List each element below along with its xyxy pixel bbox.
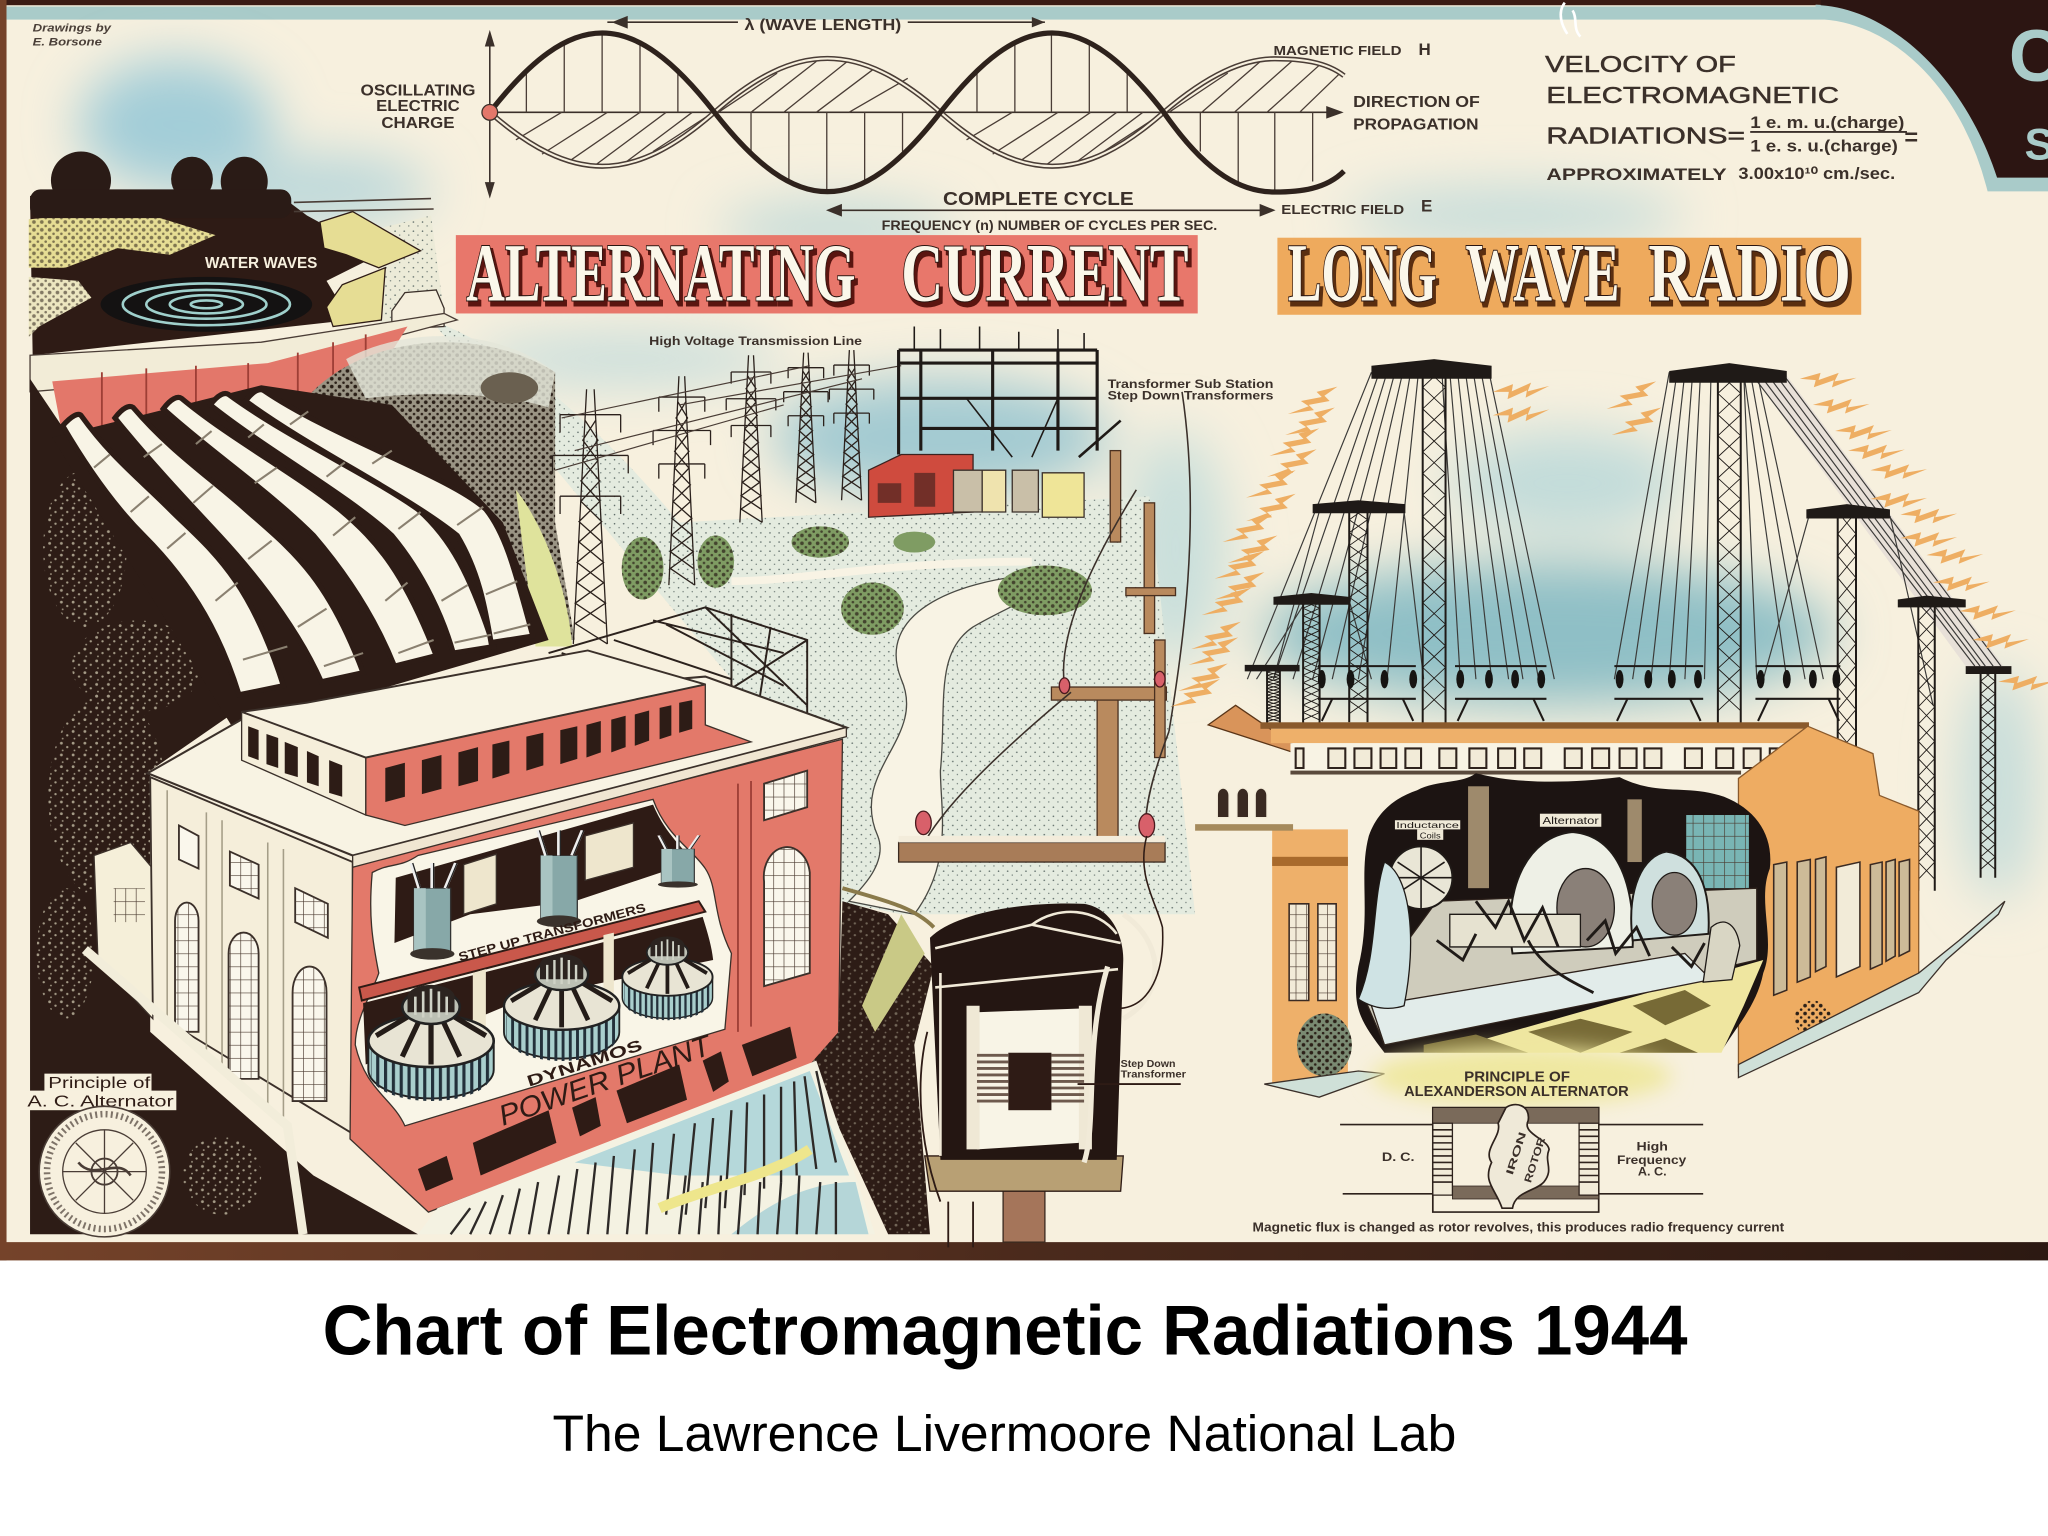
cutaway dark interior xyxy=(1356,773,1770,1053)
plant labels: STEP UP TRANSFORMERS xyxy=(457,901,647,964)
waterfall xyxy=(418,1027,875,1234)
schematic labels xyxy=(1382,1131,1686,1184)
wave labels: λ (WAVE LENGTH) xyxy=(744,17,901,34)
wave labels: DIRECTION OF xyxy=(1353,94,1480,111)
antenna wires xyxy=(1247,372,2001,705)
wave axes xyxy=(486,33,1341,196)
walkway xyxy=(1264,901,2005,1097)
floor slab xyxy=(359,901,705,1000)
cutaway interior xyxy=(355,799,731,1126)
banner: long wave radio: RADIO xyxy=(1651,231,1853,322)
oscillating charge dot xyxy=(482,104,498,120)
river xyxy=(849,575,1045,914)
velocity formula: 1 e. m. u.(charge) xyxy=(1750,114,1904,132)
banner: alternating current: CURRENT xyxy=(904,231,1191,322)
right wall windows xyxy=(1774,857,1910,995)
dark riverbank xyxy=(810,888,934,1234)
banner: long wave radio: WAVE xyxy=(1465,227,1620,318)
velocity formula: = xyxy=(1904,124,1918,150)
icon: alternator wheel xyxy=(39,1106,170,1237)
radio station building: Inductance xyxy=(1396,820,1459,830)
wave labels: CHARGE xyxy=(381,115,455,132)
velocity formula: ELECTROMAGNETIC xyxy=(1546,82,1839,108)
transmission labels xyxy=(649,335,1274,403)
red front wall xyxy=(350,739,842,1212)
alternator principle label xyxy=(25,1074,176,1110)
slide title: Chart of Electromagnetic Radiations 1944 xyxy=(323,1290,1688,1369)
velocity formula: VELOCITY OF xyxy=(1545,51,1736,77)
penstock pipes xyxy=(63,390,533,695)
bushes xyxy=(622,526,1092,635)
wave labels: OSCILLATING xyxy=(360,82,475,99)
utility poles xyxy=(899,392,1190,862)
schematic labels: D. C. xyxy=(1382,1150,1415,1164)
wave labels: H xyxy=(1418,40,1431,59)
roof and frieze xyxy=(1260,722,1809,729)
power plant: DYNAMOS xyxy=(525,1037,644,1090)
wave labels: FREQUENCY (n) NUMBER OF CYCLES PER SEC. xyxy=(882,218,1217,233)
water waves: WATER WAVES xyxy=(205,255,317,272)
waterfront hill with trees xyxy=(29,152,444,355)
lower room back wall xyxy=(363,917,713,1064)
velocity formula: RADIATIONS= xyxy=(1546,123,1745,149)
hillside right of pipes xyxy=(52,336,575,731)
magnetic flux caption: Magnetic flux is changed as rotor revolves, this produces radio frequency current xyxy=(1253,1220,1785,1235)
path along plant xyxy=(85,950,303,1234)
wave labels: PROPAGATION xyxy=(1353,116,1479,133)
left wall windows xyxy=(175,825,328,1101)
transformers tanks xyxy=(410,863,457,960)
right orange wall xyxy=(1738,726,1919,1071)
station transformers xyxy=(953,470,1084,517)
top right corner panel xyxy=(1561,0,2048,184)
alternator wheels xyxy=(1358,832,1740,1008)
banner: long wave radio xyxy=(1277,227,1861,322)
transmission towers xyxy=(552,350,901,644)
right wire band xyxy=(1750,372,2004,666)
machine labels xyxy=(1395,820,1460,829)
drawing credit: E. Borsone xyxy=(33,37,102,49)
switchyard frame xyxy=(549,607,807,731)
power plant xyxy=(94,650,846,1212)
slide subtitle: The Lawrence Livermoore National Lab xyxy=(552,1405,1456,1462)
machinery base xyxy=(1365,888,1757,1045)
alternator principle label: Principle of xyxy=(48,1075,151,1092)
alternator schematic xyxy=(1340,1105,1703,1212)
velocity formula xyxy=(1545,51,1918,184)
electromagnetic wave diagram xyxy=(482,33,1344,196)
wave labels: MAGNETIC FIELD xyxy=(1273,43,1401,58)
towers xyxy=(1423,366,1446,725)
fence lines xyxy=(294,199,434,212)
transformer core xyxy=(977,1008,1084,1149)
step down transformer label xyxy=(1121,1059,1186,1081)
wave labels: COMPLETE CYCLE xyxy=(943,188,1134,209)
arches under plant xyxy=(418,1027,797,1191)
banner: long wave radio: LONG xyxy=(1290,231,1439,322)
transmission labels: High Voltage Transmission Line xyxy=(649,335,863,348)
radio station building: Alternator xyxy=(1543,816,1600,827)
left wall xyxy=(150,777,353,1134)
transmission labels: Step Down Transformers xyxy=(1108,390,1274,403)
magnetic field curve xyxy=(490,58,1344,166)
dynamos xyxy=(622,937,713,1020)
banner: long wave radio: WAVE xyxy=(1468,231,1622,322)
roof monitor windows xyxy=(248,700,692,802)
left orange block xyxy=(1272,829,1348,1084)
roof monitor red face and shadow xyxy=(366,684,751,825)
interior pillars xyxy=(1468,786,1489,888)
schematic labels: A. C. xyxy=(1638,1165,1667,1179)
banner: long wave radio: RADIO xyxy=(1648,227,1851,318)
landscape: stippled valley xyxy=(431,320,1195,914)
electric field curve xyxy=(490,33,1344,192)
tile roof xyxy=(1208,705,1297,752)
frieze windows xyxy=(1296,748,1787,768)
principle of alexanderson alternator: PRINCIPLE OF xyxy=(1464,1069,1570,1085)
checker floor xyxy=(1384,960,1763,1053)
ground glow xyxy=(1371,1048,1672,1105)
transmission labels: Transformer Sub Station xyxy=(1108,378,1273,391)
drawing credit xyxy=(33,22,112,49)
house xyxy=(392,290,444,329)
radio wave bolts left xyxy=(1170,381,1661,707)
insulator rows xyxy=(1318,666,1840,721)
upper room back wall xyxy=(394,805,692,943)
cross arms xyxy=(1245,359,2011,674)
wave labels: ELECTRIC FIELD xyxy=(1281,202,1404,217)
banner: alternating current: CURRENT xyxy=(901,227,1189,318)
electric and magnetic arrows and hatching xyxy=(516,33,1339,192)
drawing credit: Drawings by xyxy=(33,22,112,34)
annex xyxy=(94,842,153,1019)
aqueduct wall xyxy=(30,313,457,451)
forested slope xyxy=(30,379,418,1234)
velocity formula: 3.00x10¹⁰ cm./sec. xyxy=(1738,165,1895,183)
velocity formula: 1 e. s. u.(charge) xyxy=(1750,138,1898,156)
banner: alternating current: ALTERNATING xyxy=(469,231,858,322)
sky clouds xyxy=(78,59,2038,901)
alternator principle label: A. C. Alternator xyxy=(27,1093,174,1110)
right side windows xyxy=(764,771,810,986)
water waves xyxy=(101,255,317,332)
radio antenna array xyxy=(1245,359,2011,891)
left front cream wall xyxy=(1199,773,1290,1084)
banner: alternating current: ALTERNATING xyxy=(466,227,856,318)
wave labels: ELECTRIC xyxy=(376,98,460,115)
wave labels: E xyxy=(1421,197,1432,216)
substation xyxy=(869,327,1121,517)
pole transformer xyxy=(921,836,1181,1247)
main roof xyxy=(148,677,846,856)
step down transformer label: Step Down xyxy=(1121,1059,1176,1070)
power plant: POWER PLANT xyxy=(495,1029,718,1132)
insulators xyxy=(916,671,1165,837)
teal window xyxy=(1686,815,1749,888)
shrubs xyxy=(1297,1014,1352,1076)
schematic labels: ROTOR xyxy=(1523,1136,1548,1184)
banner: long wave radio: LONG xyxy=(1288,227,1437,318)
schematic labels: High xyxy=(1637,1140,1668,1154)
principle of alexanderson alternator xyxy=(1404,1069,1629,1100)
radio station building xyxy=(1195,705,2005,1097)
radio wave bolts right xyxy=(1493,354,2048,706)
radio station building: Coils xyxy=(1420,831,1441,841)
schematic labels: IRON xyxy=(1505,1131,1529,1176)
pipe joints xyxy=(94,411,530,666)
trees xyxy=(30,152,291,218)
principle of alexanderson alternator: ALEXANDERSON ALTERNATOR xyxy=(1404,1084,1629,1100)
schematic labels: Frequency xyxy=(1617,1153,1686,1167)
velocity formula: APPROXIMATELY xyxy=(1546,165,1728,184)
step down transformer label: Transformer xyxy=(1121,1070,1186,1081)
wave labels xyxy=(360,17,1480,233)
